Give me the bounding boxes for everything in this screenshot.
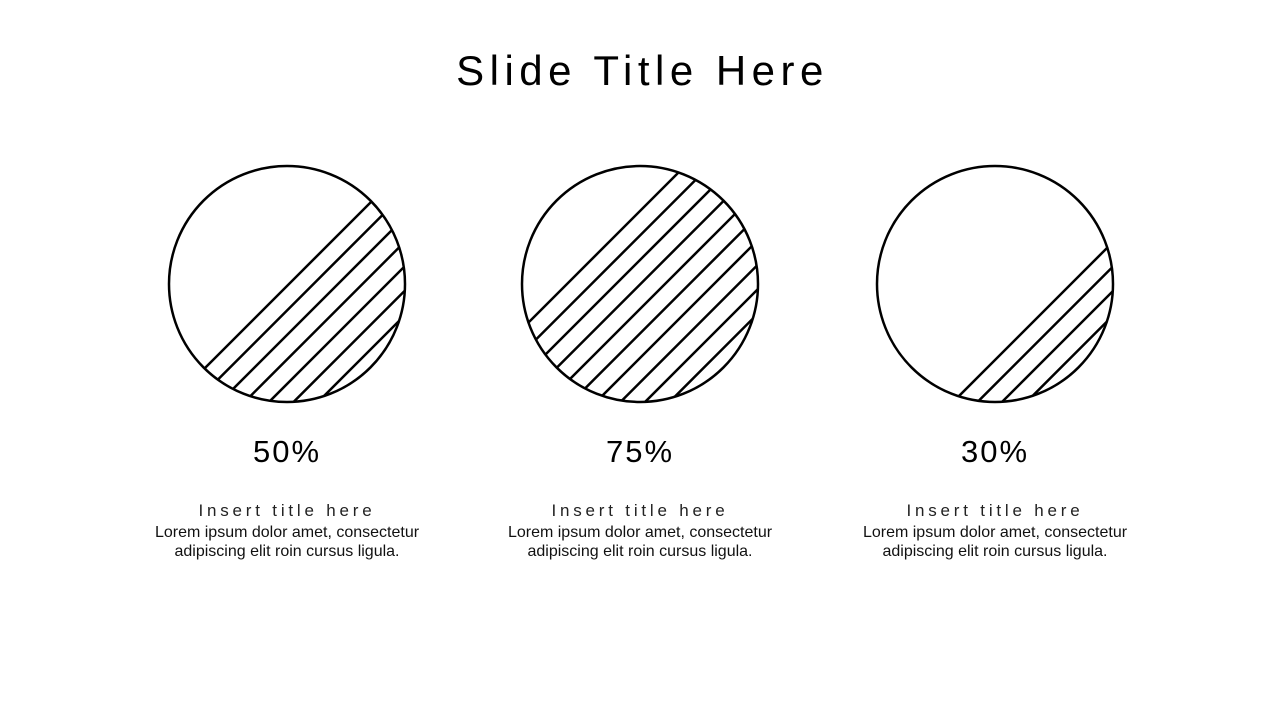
column 1 text [155,434,419,560]
body 2: Lorem ipsum dolor amet, consectetur [508,524,772,541]
title: Slide Title Here [456,47,829,94]
subtitle 2: Insert title here [551,501,729,520]
chart: 75% [520,164,760,404]
column 3 text [863,434,1127,560]
body 1 [155,524,419,560]
chart: 30% [876,164,1114,404]
column 2 text [508,434,772,560]
subtitle 1: Insert title here [198,501,376,520]
pie charts [168,164,1114,404]
value 1: 50% [253,434,321,469]
subtitle 3: Insert title here [906,501,1084,520]
value 3: 30% [961,434,1029,469]
value 2: 75% [606,434,674,469]
body 1: adipiscing elit roin cursus ligula. [174,543,400,560]
body 3 [863,524,1127,560]
body 2: adipiscing elit roin cursus ligula. [528,543,752,560]
body 3: Lorem ipsum dolor amet, consectetur [863,524,1127,541]
body 1: Lorem ipsum dolor amet, consectetur [155,524,419,541]
chart: 50% [168,164,406,404]
body 2 [508,524,772,560]
body 3: adipiscing elit roin cursus ligula. [882,543,1108,560]
